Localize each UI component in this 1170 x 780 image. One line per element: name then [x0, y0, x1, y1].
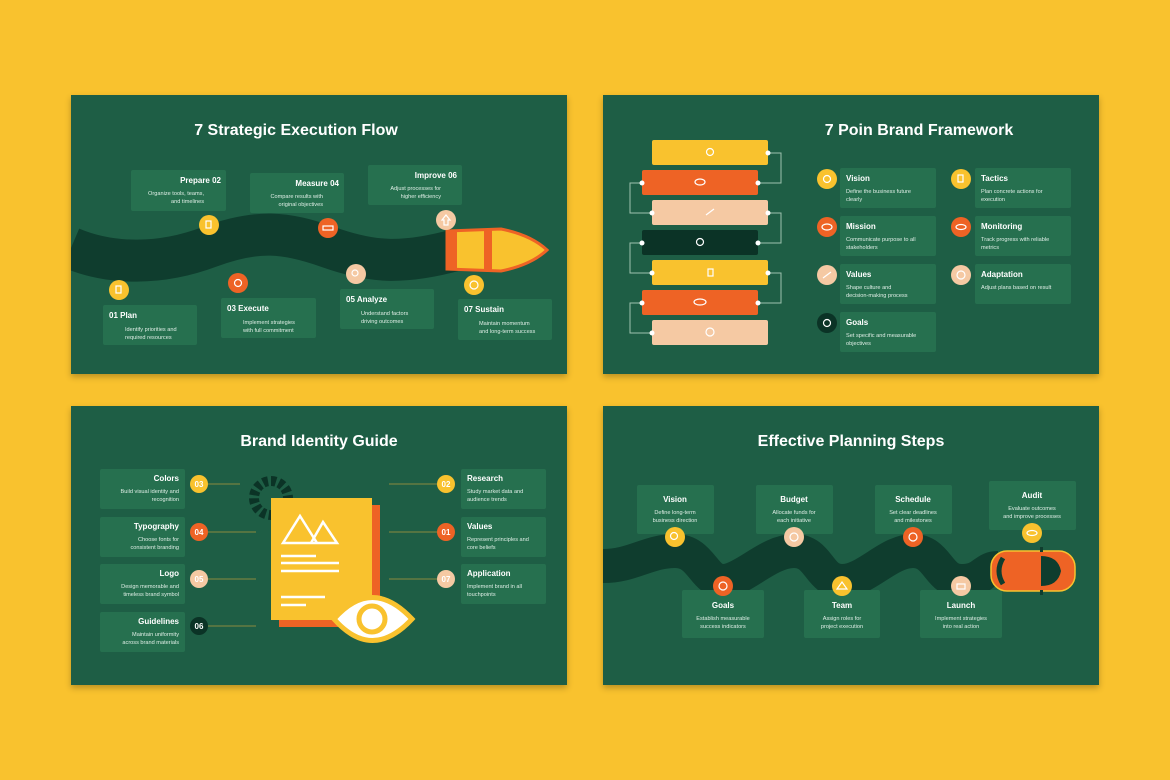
step icons: [109, 210, 484, 300]
bottom step boxes: into real action: [943, 624, 979, 630]
title: 7 Poin Brand Framework: [825, 122, 1013, 139]
cards: Define the business future: [846, 189, 911, 195]
left items: timeless brand symbol: [123, 592, 179, 598]
step boxes: Compare results with: [270, 194, 323, 200]
top step boxes: [637, 481, 1076, 534]
panel: 7 Strategic Execution Flow: [71, 95, 567, 374]
step boxes: Improve 06: [415, 171, 458, 180]
step boxes: with full commitment: [242, 328, 294, 334]
left items: [100, 469, 208, 652]
left items: Choose fonts for: [138, 537, 179, 543]
top step boxes: and improve processes: [1003, 514, 1061, 520]
right items: Values: [467, 522, 493, 531]
bottom step boxes: [682, 590, 1002, 638]
cards: clearly: [846, 197, 862, 203]
cards: Set specific and measurable: [846, 333, 916, 339]
step boxes: required resources: [125, 335, 172, 341]
stacked bars: [640, 140, 770, 345]
left items: 06: [195, 622, 204, 631]
bottom step boxes: Assign roles for: [823, 616, 861, 622]
icon: car: [991, 547, 1075, 595]
right items: 01: [442, 528, 451, 537]
right items: Study market data and: [467, 489, 523, 495]
title: Brand Identity Guide: [240, 433, 398, 450]
step boxes: original objectives: [279, 202, 323, 208]
left items: Maintain uniformity: [132, 632, 179, 638]
step boxes: [103, 165, 552, 345]
panel: Effective Planning Steps: [603, 406, 1099, 685]
step boxes: higher efficiency: [401, 194, 441, 200]
cards: Goals: [846, 318, 869, 327]
step boxes: 03 Execute: [227, 304, 269, 313]
step boxes: driving outcomes: [361, 319, 403, 325]
left items: recognition: [152, 497, 179, 503]
left items: Design memorable and: [121, 584, 179, 590]
step boxes: Maintain momentum: [479, 321, 530, 327]
right items: 07: [442, 575, 451, 584]
road: [603, 551, 998, 581]
left items: consistent branding: [130, 545, 179, 551]
cards: Values: [846, 270, 872, 279]
left items: Build visual identity and: [121, 489, 179, 495]
cards: Communicate purpose to all: [846, 237, 916, 243]
cards: Mission: [846, 222, 876, 231]
panel: Brand Identity Guide: [71, 406, 567, 685]
top step boxes: Vision: [663, 495, 687, 504]
bottom step boxes: Team: [832, 601, 852, 610]
cards: execution: [981, 197, 1005, 203]
right items: core beliefs: [467, 545, 496, 551]
document illustration: [254, 481, 412, 640]
step boxes: and timelines: [171, 199, 204, 205]
cards: Shape culture and: [846, 285, 891, 291]
step boxes: Identify priorities and: [125, 327, 177, 333]
top step boxes: Schedule: [895, 495, 931, 504]
right items: 02: [442, 480, 451, 489]
cards: Vision: [846, 174, 870, 183]
title: 7 Strategic Execution Flow: [194, 122, 398, 139]
step boxes: Prepare 02: [180, 176, 222, 185]
step boxes: Implement strategies: [243, 320, 295, 326]
cards: [817, 168, 1071, 352]
bottom step boxes: Launch: [947, 601, 975, 610]
top step boxes: and milestones: [894, 518, 932, 524]
bottom step boxes: Implement strategies: [935, 616, 987, 622]
cards: Plan concrete actions for: [981, 189, 1043, 195]
step boxes: Understand factors: [361, 311, 408, 317]
step icons: [665, 523, 1042, 596]
right items: Implement brand in all: [467, 584, 522, 590]
panel: 7 Poin Brand Framework: [603, 95, 1099, 374]
left items: across brand materials: [122, 640, 179, 646]
rocket: [447, 229, 547, 271]
bottom step boxes: Goals: [712, 601, 735, 610]
cards: Adjust plans based on result: [981, 285, 1052, 291]
bottom step boxes: success indicators: [700, 624, 746, 630]
right items: audience trends: [467, 497, 507, 503]
left items: 05: [195, 575, 204, 584]
cards: Tactics: [981, 174, 1009, 183]
title: Effective Planning Steps: [758, 433, 944, 450]
top step boxes: Evaluate outcomes: [1008, 506, 1056, 512]
cards: metrics: [981, 245, 999, 251]
cards: Monitoring: [981, 222, 1022, 231]
step boxes: 07 Sustain: [464, 305, 504, 314]
step boxes: Measure 04: [295, 179, 340, 188]
top step boxes: Audit: [1022, 491, 1043, 500]
top step boxes: Allocate funds for: [772, 510, 816, 516]
left items: Typography: [134, 522, 180, 531]
connector lines: [199, 484, 446, 626]
cards: Adaptation: [981, 270, 1023, 279]
right items: Represent principles and: [467, 537, 529, 543]
top step boxes: Define long-term: [654, 510, 696, 516]
step boxes: Organize tools, teams,: [148, 191, 204, 197]
left items: Guidelines: [138, 617, 180, 626]
right items: Research: [467, 474, 503, 483]
top step boxes: Set clear deadlines: [889, 510, 937, 516]
cards: stakeholders: [846, 245, 878, 251]
step boxes: and long-term success: [479, 329, 535, 335]
right items: Application: [467, 569, 511, 578]
right items: [437, 469, 546, 604]
left items: 03: [195, 480, 204, 489]
step boxes: 05 Analyze: [346, 295, 388, 304]
top step boxes: Budget: [780, 495, 808, 504]
bottom step boxes: project execution: [821, 624, 863, 630]
connectors: [630, 153, 781, 333]
top step boxes: each initiative: [777, 518, 811, 524]
cards: decision-making process: [846, 293, 908, 299]
top step boxes: business direction: [653, 518, 697, 524]
step boxes: 01 Plan: [109, 311, 137, 320]
cards: Track progress with reliable: [981, 237, 1049, 243]
cards: objectives: [846, 341, 871, 347]
left items: 04: [195, 528, 204, 537]
bottom step boxes: Establish measurable: [696, 616, 750, 622]
left items: Logo: [159, 569, 179, 578]
step boxes: Adjust processes for: [390, 186, 441, 192]
left items: Colors: [154, 474, 180, 483]
right items: touchpoints: [467, 592, 496, 598]
road: [71, 235, 456, 261]
